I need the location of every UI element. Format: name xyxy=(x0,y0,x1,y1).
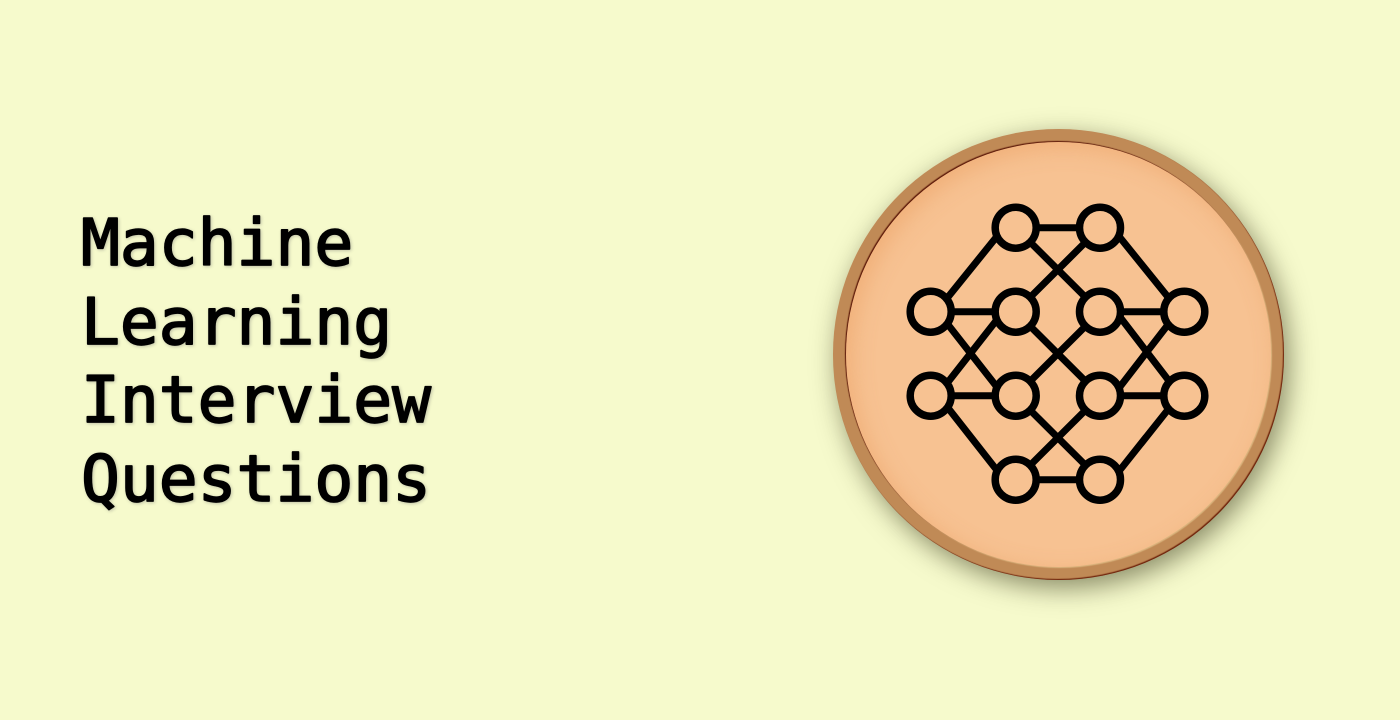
badge face xyxy=(846,142,1271,567)
badge: circular medallion xyxy=(833,129,1284,580)
network nodes xyxy=(910,207,1205,500)
title line 2: Learning xyxy=(81,285,392,360)
title line 1: Machine xyxy=(81,206,353,281)
network connections xyxy=(931,228,1184,480)
title xyxy=(81,206,434,517)
title line 4: Questions xyxy=(81,442,431,517)
title line 3: Interview xyxy=(81,363,431,438)
